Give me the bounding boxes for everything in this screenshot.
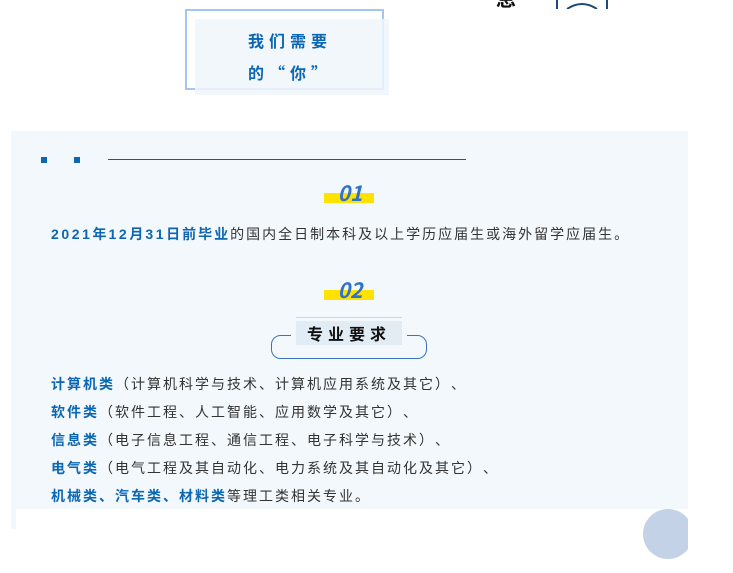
heading label	[296, 317, 402, 345]
heading bracket	[271, 335, 427, 359]
graduation requirement text: 2021年12月31日前毕业的国内全日制本科及以上学历应届生或海外留学应届生。	[51, 226, 630, 242]
title box	[185, 9, 389, 95]
title text: 我们需要	[248, 28, 332, 52]
section 02 marker	[324, 275, 374, 305]
yellow bar	[324, 193, 374, 203]
major requirements heading	[271, 317, 427, 359]
information majors: 信息类（电子信息工程、通信工程、电子科学与技术）、	[51, 432, 451, 448]
main panel	[11, 131, 688, 529]
yellow bar	[324, 290, 374, 300]
computer majors: 计算机类（计算机科学与技术、计算机应用系统及其它）、	[51, 376, 467, 392]
electrical majors: 电气类（电气工程及其自动化、电力系统及其自动化及其它）、	[51, 460, 499, 476]
header rule	[108, 159, 466, 160]
header square marker right	[74, 157, 80, 163]
heading label: 专业要求	[307, 327, 391, 344]
software majors: 软件类（软件工程、人工智能、应用数学及其它）、	[51, 404, 419, 420]
header square marker left	[41, 157, 47, 163]
title text	[248, 28, 332, 84]
cropped circle icon	[556, 0, 608, 9]
title overlay panel	[195, 19, 389, 95]
section 01 marker	[324, 178, 374, 208]
circle decoration	[643, 509, 688, 559]
title text: 的“你”	[248, 60, 332, 84]
number 02: 02	[338, 275, 362, 305]
major list	[51, 376, 499, 504]
title frame	[185, 9, 384, 90]
number 01: 01	[338, 178, 362, 208]
white footer cutout	[16, 509, 696, 573]
top-right cropped decoration	[496, 0, 608, 9]
other engineering majors: 机械类、汽车类、材料类等理工类相关专业。	[51, 488, 371, 504]
